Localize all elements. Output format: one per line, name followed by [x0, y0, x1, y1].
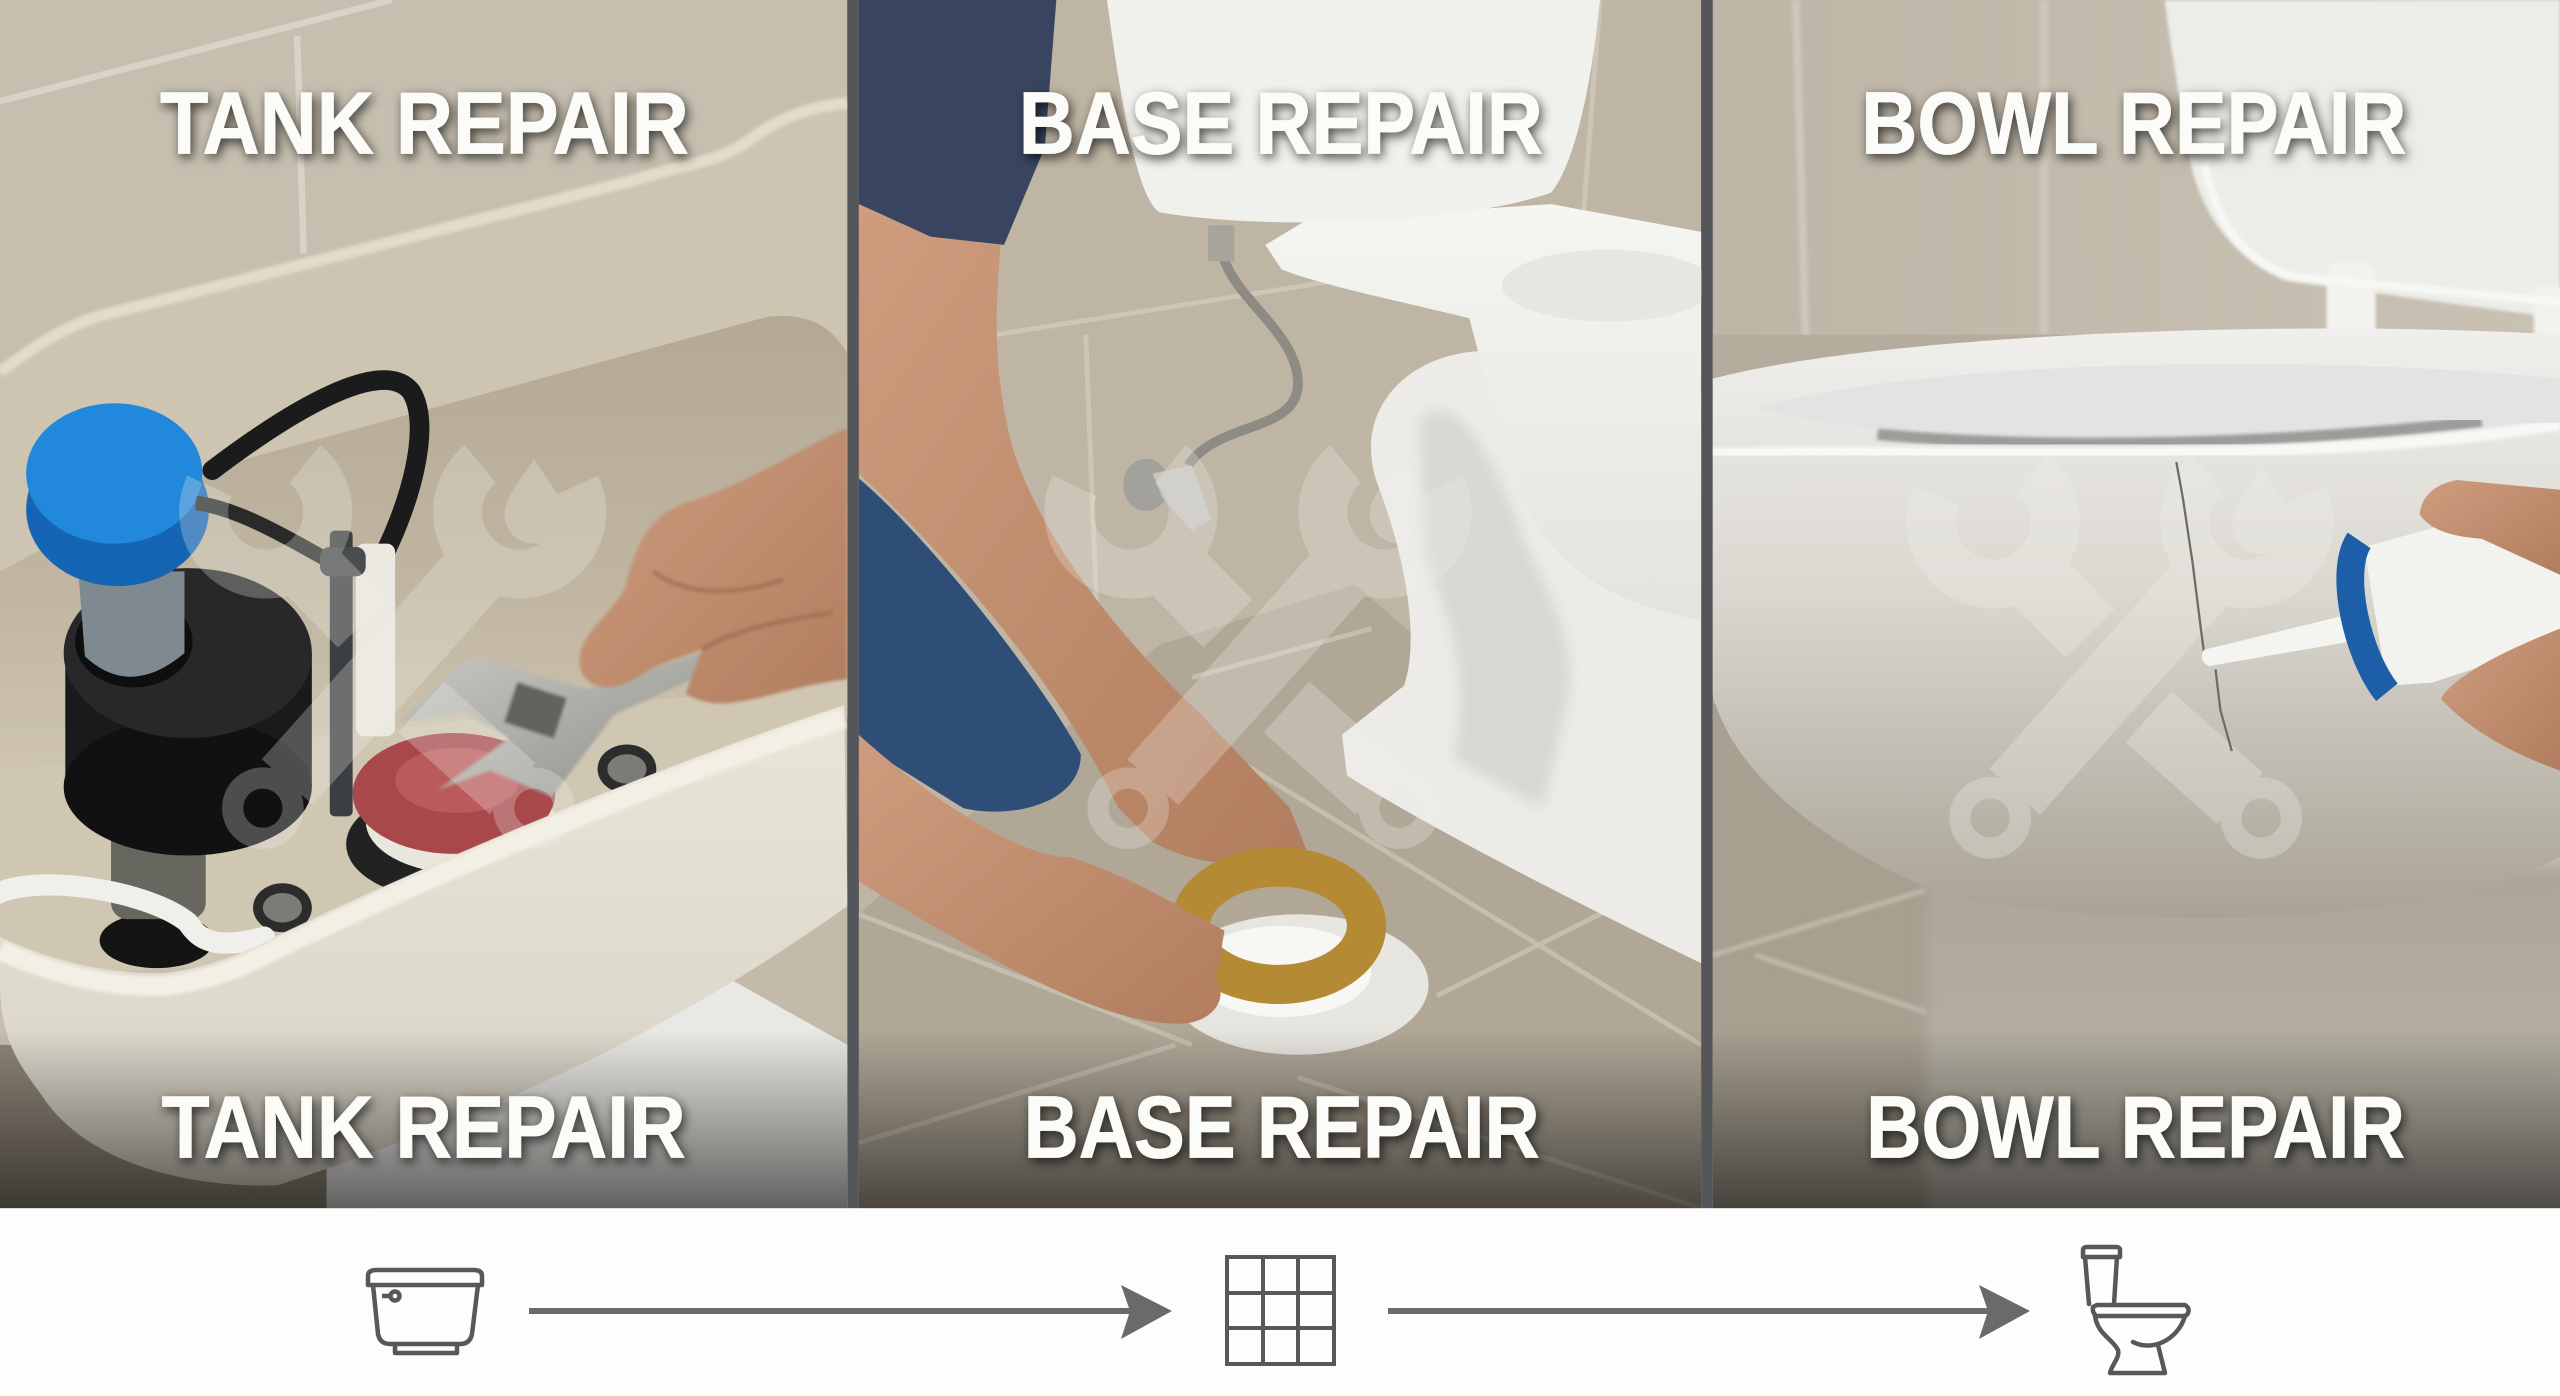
toilet bowl [1265, 204, 1701, 620]
raised seat lid [2165, 0, 2560, 351]
watermark [1925, 469, 2315, 848]
panel: bowl repair [1713, 0, 2560, 1224]
supply pipe and valve [1123, 225, 1298, 531]
gaskets [253, 744, 656, 932]
wax ring [1190, 867, 1367, 984]
icon: toilet tank [368, 1270, 482, 1353]
tiled wall [1713, 0, 2560, 1208]
jeans [859, 478, 1081, 812]
tiled wall [0, 0, 847, 1208]
icon: toilet [2083, 1247, 2189, 1373]
caption: bowl repair: BOWL REPAIR [1866, 1078, 2405, 1177]
caption: tank repair: TANK REPAIR [162, 1078, 686, 1177]
toilet pedestal [1342, 351, 1701, 963]
hand [2420, 480, 2560, 771]
tank back wall and rim [0, 103, 847, 980]
adjustable wrench [404, 653, 700, 798]
hand [580, 428, 847, 703]
icon: floor tile grid [1227, 1257, 1334, 1364]
lower arm and hand [859, 735, 1224, 1024]
fill valve [26, 403, 312, 968]
arrow: tank to base [529, 1285, 1172, 1339]
white handle [0, 885, 264, 943]
flange [1167, 914, 1429, 1055]
toilet tank [1107, 0, 1600, 222]
heading: base repair top: BASE REPAIR [1019, 73, 1543, 172]
tank front wall [0, 705, 847, 1186]
panel: base repair [859, 0, 1714, 1208]
toilet bowl [1713, 328, 2560, 918]
caption: base repair: BASE REPAIR [1024, 1078, 1540, 1177]
toilet body below the tank [327, 963, 847, 1208]
heading: bowl repair top: BOWL REPAIR [1861, 73, 2407, 172]
white overflow tube [356, 544, 395, 736]
upper arm [859, 204, 1306, 864]
watermark [1063, 459, 1453, 838]
bottom fade [859, 1029, 1701, 1208]
heading: tank repair top: TANK REPAIR [160, 73, 689, 172]
watermark [198, 459, 588, 838]
shirt [859, 0, 1056, 245]
black hose [212, 380, 420, 552]
arrow: base to bowl [1388, 1285, 2030, 1339]
seat opening [1502, 250, 1714, 322]
bottom fade [0, 1029, 847, 1208]
valve arm and rod [196, 503, 366, 816]
caulk tube [2202, 519, 2560, 692]
tiled wall [859, 0, 1701, 1208]
toilet pedestal [1927, 865, 2560, 1224]
panel: tank repair [0, 0, 847, 1208]
flapper and seat [346, 733, 555, 898]
crack [2176, 462, 2232, 751]
bottom fade [1713, 1029, 2560, 1208]
lower wall [1712, 702, 1930, 1208]
tile floor [859, 584, 1701, 1208]
